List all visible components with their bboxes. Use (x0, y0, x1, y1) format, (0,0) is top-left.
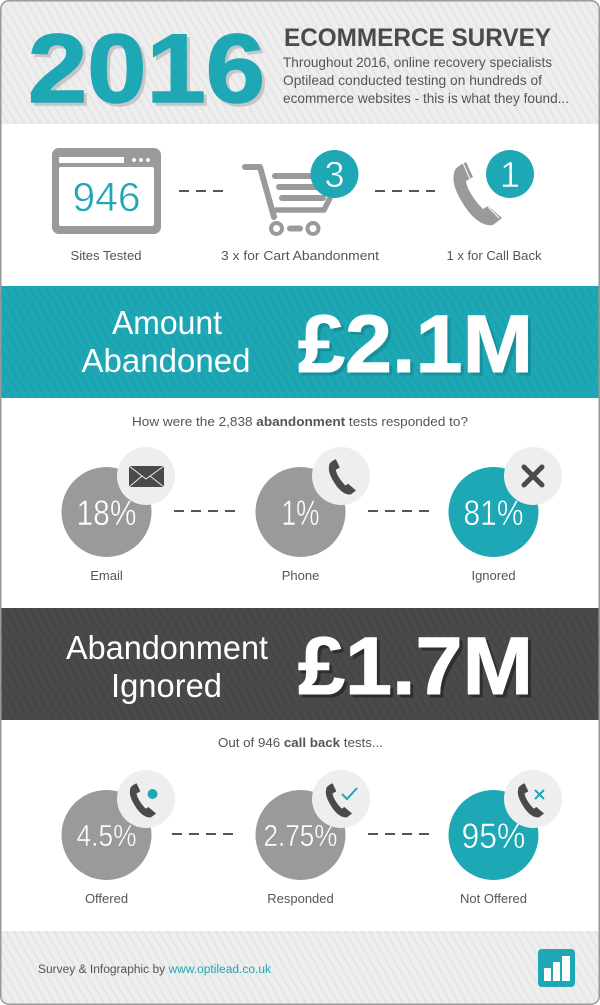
band heading: Abandoned (82, 342, 250, 379)
intro text: ecommerce websites - this is what they found... (283, 90, 569, 106)
icon: browser 946 sites tested (52, 148, 161, 234)
stat: offered 4.5%: 4.5% (76, 818, 136, 853)
band: abandonment ignored (0, 608, 600, 720)
intro text (283, 54, 569, 106)
icon: optilead logo (538, 949, 575, 987)
stat: phone 1%: Phone (282, 568, 319, 583)
dashed connector (179, 190, 223, 192)
band heading (82, 304, 250, 379)
icon: cart with badge 3 (245, 150, 358, 234)
icon: cart with badge 3: 3 (324, 154, 345, 195)
stat: email 18%: Email (90, 568, 123, 583)
footer panel (0, 931, 600, 1005)
icon: browser 946 sites tested: 946 (72, 174, 140, 220)
dashed connector (368, 833, 429, 835)
intro text: Optilead conducted testing on hundreds of (283, 72, 542, 88)
stat: not offered 95% (448, 770, 562, 906)
stat: ignored 81% (448, 447, 562, 583)
stat: email 18%: 18% (76, 494, 136, 533)
intro text: Throughout 2016, online recovery specialists (283, 54, 552, 70)
year 2016: 2016 (31, 17, 268, 126)
stat: phone 1% (256, 447, 370, 583)
stat: responded 2.75%: 2.75% (264, 818, 338, 853)
stat: ignored 81%: Ignored (471, 568, 516, 583)
figure 2.1M: £2.1M (301, 302, 536, 393)
stat: phone 1%: 1% (282, 494, 320, 533)
dashed connector (174, 510, 235, 512)
stat: not offered 95%: Not Offered (460, 891, 527, 906)
dashed connector (368, 510, 429, 512)
label: cart abandonment: 3 x for Cart Abandonment (221, 248, 379, 263)
footer credit: Survey & Infographic by www.optilead.co.uk (38, 964, 271, 976)
stat: email 18% (62, 447, 175, 583)
stat: offered 4.5%: Offered (85, 891, 128, 906)
figure 1.7M: £1.7M (301, 624, 536, 715)
figure 1.7M: £1.7M (298, 621, 533, 712)
label: sites tested: Sites Tested (70, 248, 142, 263)
question heading: How were the 2,838 abandonment tests responded to? (132, 414, 468, 429)
year 2016: 2016 (28, 14, 265, 123)
band: amount abandoned (0, 286, 600, 398)
band heading: Ignored (111, 667, 222, 704)
dashed connector (375, 190, 435, 192)
stat: responded 2.75%: Responded (267, 891, 334, 906)
stat: offered 4.5% (62, 770, 175, 906)
stat: not offered 95%: 95% (462, 817, 526, 856)
label: call back: 1 x for Call Back (446, 248, 542, 263)
stat: responded 2.75% (256, 770, 370, 906)
stat: ignored 81%: 81% (464, 494, 524, 533)
band heading: Amount (112, 304, 222, 341)
band heading: Abandonment (66, 629, 268, 666)
icon: phone with badge 1 (453, 150, 534, 225)
dashed connector (172, 833, 233, 835)
survey title: ECOMMERCE SURVEY (284, 24, 551, 52)
header panel (0, 0, 600, 126)
figure 2.1M: £2.1M (298, 299, 533, 390)
icon: phone with badge 1: 1 (500, 154, 520, 195)
band heading (66, 629, 268, 704)
question heading: Out of 946 call back tests... (218, 735, 383, 750)
